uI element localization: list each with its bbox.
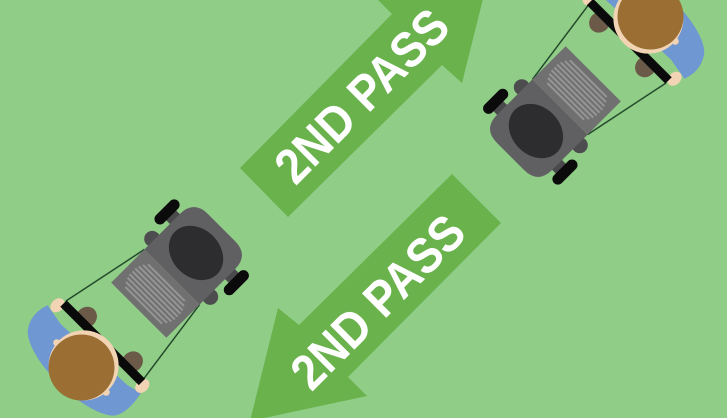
wheels — [137, 197, 252, 312]
handle wires — [523, 5, 666, 148]
arrow: up-right 2nd pass — [240, 0, 493, 217]
mower and person: upper right — [467, 0, 724, 206]
handle wires — [66, 236, 209, 379]
hands — [580, 0, 684, 91]
arrow label: down-left: 2ND PASS — [280, 204, 476, 400]
handle bar — [587, 0, 672, 84]
hair — [35, 321, 128, 414]
shoes — [72, 302, 147, 377]
handle bar — [60, 300, 145, 385]
mower and person: lower left — [8, 178, 265, 418]
mower body — [144, 200, 249, 305]
grass catcher deck — [532, 46, 621, 135]
deck vents — [543, 56, 611, 124]
mower engine cover — [158, 215, 234, 291]
arrow: down-left 2nd pass — [250, 174, 501, 418]
hair — [604, 0, 697, 63]
hands — [48, 293, 152, 398]
shoes — [585, 7, 660, 82]
grass catcher deck — [111, 249, 200, 338]
deck vents — [121, 260, 189, 328]
neck and ears — [596, 0, 700, 71]
wheels — [480, 72, 595, 187]
neck and ears — [32, 313, 136, 417]
shirt and arms — [590, 0, 720, 83]
shirt and arms — [12, 301, 142, 418]
mower engine cover — [498, 93, 574, 169]
mower body — [483, 79, 588, 184]
